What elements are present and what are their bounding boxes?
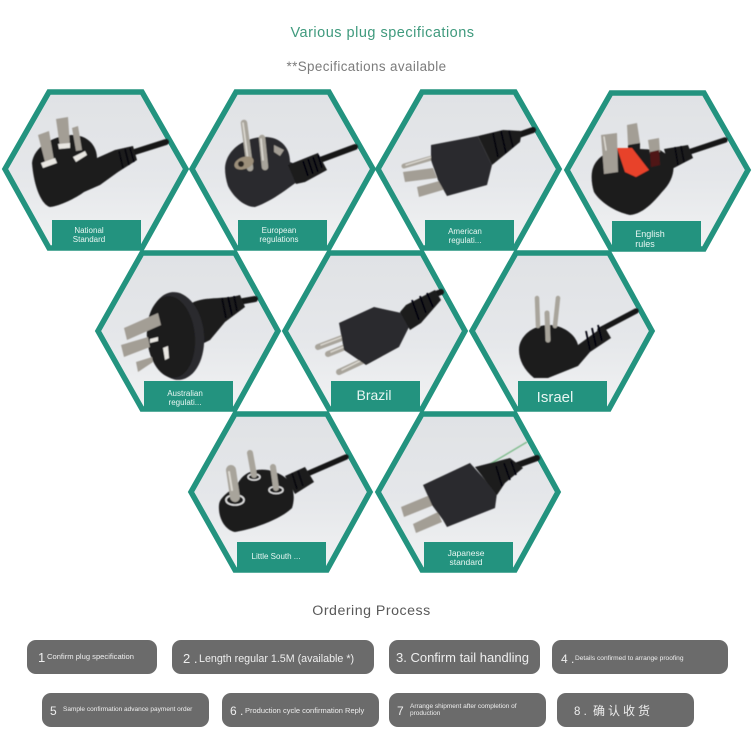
label: English rules: English — [635, 229, 665, 239]
label: National Standard — [52, 220, 141, 250]
label: Australian regulations: Australian — [167, 389, 203, 398]
label: American regulations: American — [448, 227, 482, 236]
step 7 — [389, 693, 546, 727]
step 8: 确认收货 — [593, 703, 653, 718]
title: Various plug specifications — [290, 25, 475, 41]
step 3 — [389, 640, 540, 674]
step 5: Sample confirmation advance payment order — [63, 706, 193, 713]
panel: Japanese standard plug — [378, 414, 558, 571]
step 8: 8 . — [574, 706, 587, 718]
step 2: Length regular 1.5M (available *) — [199, 653, 354, 665]
label: Little South: Little South ... — [252, 552, 300, 561]
panel: Australian regulations plug — [98, 253, 278, 410]
step 2: 2 . — [183, 651, 197, 666]
label: Israel — [518, 381, 607, 411]
label: English rules: rules — [635, 239, 655, 249]
label: English rules — [612, 221, 701, 250]
step 6: Production cycle confirmation Reply — [245, 706, 364, 715]
label: Little South — [237, 542, 326, 571]
label: Japanese standard: Japanese — [448, 548, 485, 558]
label: Japanese standard: standard — [449, 557, 483, 567]
panel: European regulations plug — [192, 92, 373, 250]
step 4 — [552, 640, 728, 674]
icon: australian plug — [121, 290, 255, 382]
step 5 — [42, 693, 209, 727]
label: American regulations: regulati... — [449, 236, 481, 245]
step 6: 6 . — [230, 704, 243, 718]
panel: Little South Africa plug — [191, 414, 370, 571]
icon: national standard plug — [32, 117, 166, 207]
step 7: production — [410, 710, 441, 717]
label: European regulations: regulations — [259, 235, 299, 244]
label: European regulations: European — [262, 226, 296, 235]
step 1: 1 — [38, 650, 45, 665]
label: Israel: Israel — [537, 389, 573, 406]
step 3: 3. Confirm tail handling — [396, 650, 529, 665]
label: Brazil — [331, 381, 420, 410]
panel: American regulations plug — [378, 92, 559, 248]
icon: israel plug — [519, 298, 636, 378]
heading: ordering process: Ordering Process — [312, 603, 431, 619]
step 8 — [557, 693, 694, 727]
panel: Brazil plug — [285, 253, 465, 410]
icon: uk plug — [592, 123, 725, 215]
step 7: Arrange shipment after completion of — [410, 703, 517, 710]
panel: National Standard plug — [5, 92, 186, 250]
label: Australian regulations — [144, 381, 233, 410]
step 1 — [27, 640, 157, 674]
icon: south africa plug — [219, 453, 346, 532]
subtitle: **Specifications available — [286, 59, 447, 74]
step 7: 7 — [397, 704, 404, 718]
step 2 — [172, 640, 374, 674]
step 6 — [222, 693, 379, 727]
label: Japanese standard — [424, 542, 513, 571]
step 1: Confirm plug specification — [47, 652, 134, 661]
label: Australian regulations: regulati... — [169, 398, 201, 407]
step 4: 4 . — [561, 652, 574, 666]
label: Brazil: Brazil — [356, 387, 392, 403]
label: European regulations — [238, 220, 327, 250]
icon: american plug — [403, 130, 533, 197]
icon: brazil plug — [318, 290, 441, 372]
panel: English rules plug — [567, 93, 748, 250]
label: National Standard: Standard — [73, 235, 105, 244]
label: American regulations — [425, 220, 514, 248]
step 4: Details confirmed to arrange proofing — [575, 655, 684, 662]
icon: european plug — [225, 123, 355, 207]
panel: Israel plug — [472, 253, 652, 411]
step 5: 5 — [50, 704, 57, 718]
label: National Standard: National — [74, 226, 104, 235]
icon: japanese plug — [401, 442, 537, 533]
